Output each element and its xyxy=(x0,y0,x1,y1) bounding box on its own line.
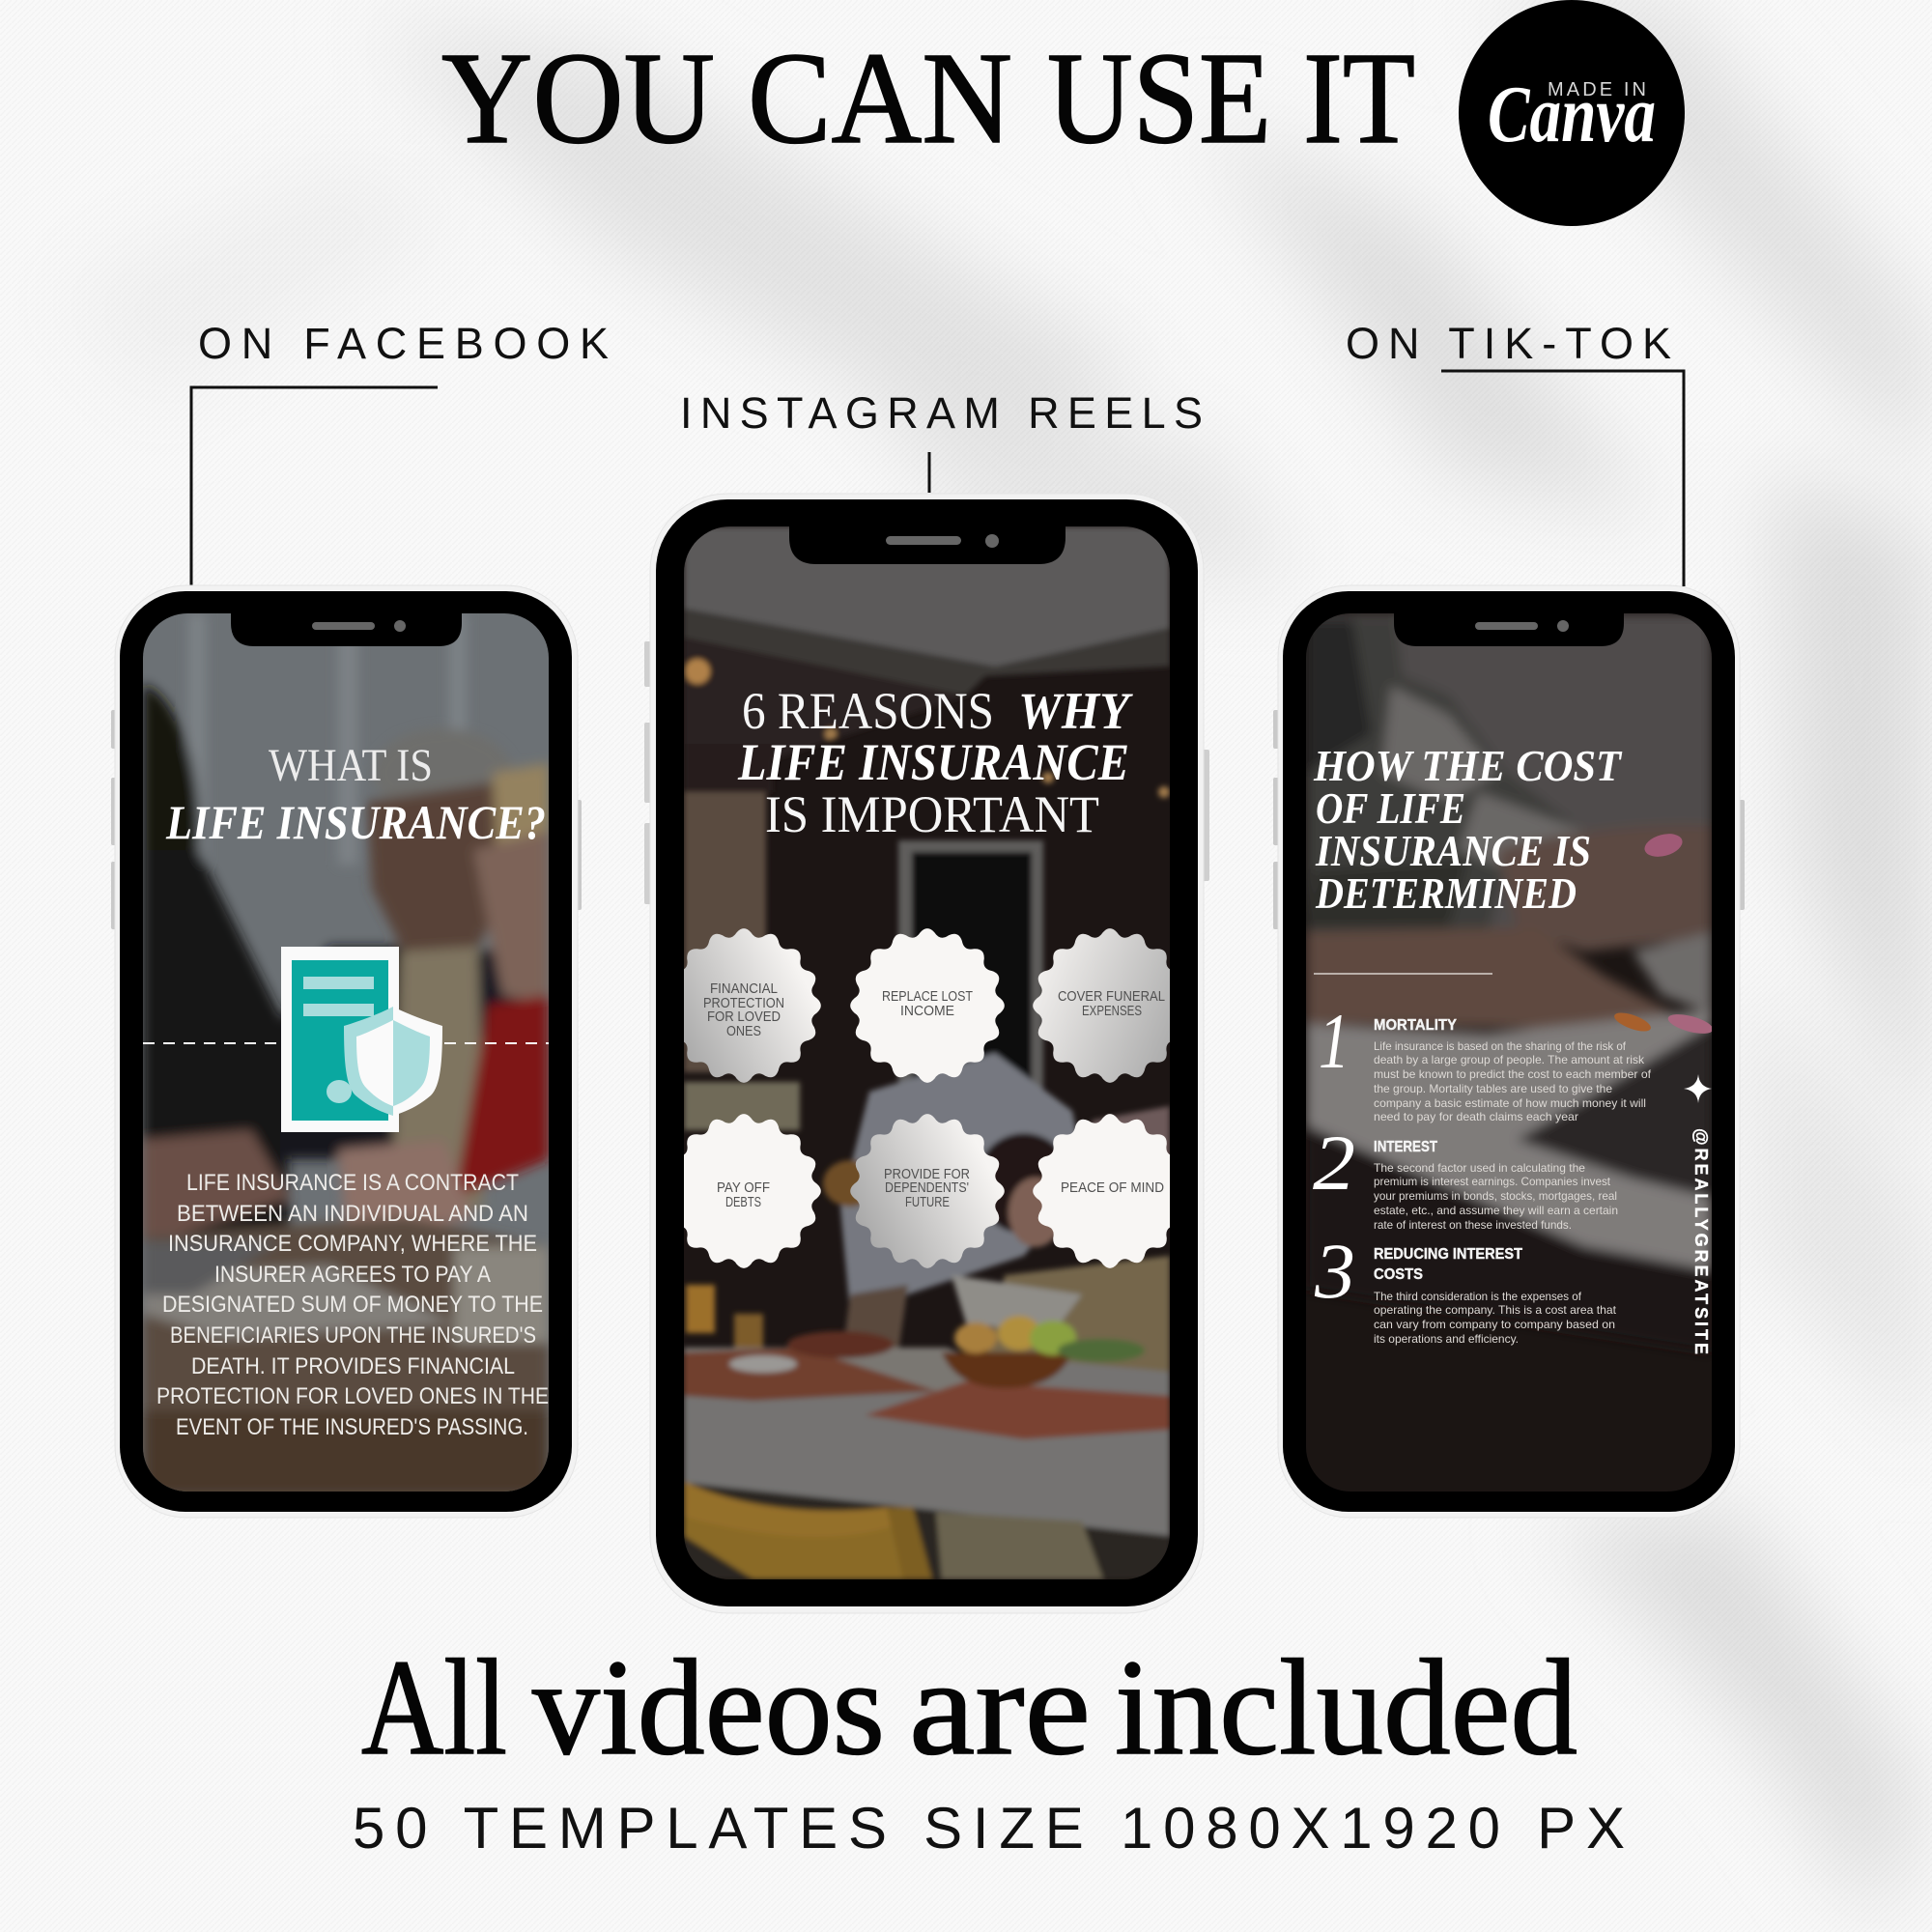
section 1: mortality: must be known to predict the cost to each member of xyxy=(1374,1067,1652,1081)
section 2: interest xyxy=(1313,1119,1618,1232)
screen photo: family meeting xyxy=(143,613,549,1497)
footer heading: videos xyxy=(532,1631,885,1783)
badge: cover funeral expenses xyxy=(1033,928,1170,1083)
section 2: interest: rate of interest on these invested funds. xyxy=(1374,1218,1572,1232)
badge: made in canva xyxy=(1459,0,1685,226)
heading: what is life insurance xyxy=(165,740,546,849)
text block: definition: DEATH. IT PROVIDES FINANCIAL xyxy=(191,1353,515,1379)
badge: financial protection xyxy=(684,928,821,1083)
connector: instagram xyxy=(927,452,931,493)
footer heading: All xyxy=(361,1631,507,1783)
heading: 6 reasons: LIFE INSURANCE xyxy=(737,733,1129,791)
footer heading: included xyxy=(1115,1631,1577,1783)
section 2: interest: premium is interest earnings. Companies invest xyxy=(1374,1175,1611,1188)
phone: facebook xyxy=(111,585,582,1518)
screen photo: hands on laptop xyxy=(1306,613,1715,1492)
screen photo: family at table xyxy=(684,526,1170,1579)
badge: peace of mind xyxy=(1033,1114,1170,1268)
handle text: @REALLYGREATSITE xyxy=(1691,1128,1711,1354)
section 2: interest: estate, etc., and assume they will earn a certain xyxy=(1374,1204,1618,1217)
text block: definition: BENEFICIARIES UPON THE INSURED'S xyxy=(170,1322,536,1349)
label: on facebook: ON FACEBOOK xyxy=(198,319,609,368)
section 3: reducing interest costs: can vary from company to company based on xyxy=(1374,1318,1615,1331)
text block: definition: INSURER AGREES TO PAY A xyxy=(214,1262,491,1288)
badge: financial protection: PROTECTION xyxy=(703,995,784,1011)
text block: definition: DESIGNATED SUM OF MONEY TO THE xyxy=(162,1292,543,1318)
label: instagram reels: INSTAGRAM REELS xyxy=(680,388,1203,438)
badge: replace lost income: REPLACE LOST xyxy=(882,988,973,1005)
heading: how the cost xyxy=(1313,741,1623,918)
label: on tik-tok: ON TIK-TOK xyxy=(1346,319,1671,368)
heading: how the cost: HOW THE COST xyxy=(1313,741,1623,790)
reason badges xyxy=(667,928,1187,1268)
section 1: mortality: company a basic estimate of how much money it will xyxy=(1374,1096,1646,1110)
badge: dependents' future: PROVIDE FOR xyxy=(884,1166,970,1182)
phone: instagram reels xyxy=(644,494,1209,1613)
text block: definition: LIFE INSURANCE IS A CONTRACT xyxy=(186,1170,519,1196)
section 1: mortality: Life insurance is based on the sharing of the risk of xyxy=(1374,1039,1627,1053)
title xyxy=(441,26,1415,171)
badge: dependents' future: DEPENDENTS' xyxy=(885,1179,969,1196)
heading: 6 reasons: IS IMPORTANT xyxy=(765,785,1099,843)
section 2: interest: The second factor used in calculating the xyxy=(1374,1161,1585,1175)
footer heading xyxy=(361,1631,1577,1783)
badge: pay off debts: DEBTS xyxy=(725,1194,761,1210)
badge: pay off debts: PAY OFF xyxy=(717,1179,770,1196)
section 1: mortality: the group. Mortality tables are used to give the xyxy=(1374,1082,1612,1095)
badge: financial protection: FOR LOVED xyxy=(707,1009,781,1025)
text block: definition xyxy=(156,1170,549,1440)
heading: how the cost: INSURANCE IS xyxy=(1315,826,1591,875)
section 1: mortality: death by a large group of people. The amount at risk xyxy=(1374,1053,1645,1066)
heading: how the cost: OF LIFE xyxy=(1316,783,1465,833)
heading: how the cost: DETERMINED xyxy=(1315,868,1577,918)
badge: replace lost income xyxy=(850,928,1005,1083)
title: USE xyxy=(1047,26,1271,171)
icon: policy document with shield xyxy=(143,947,549,1132)
badge: dependents' future xyxy=(850,1114,1005,1268)
badge: financial protection: ONES xyxy=(726,1023,761,1039)
section 3: reducing interest costs: 3 xyxy=(1314,1227,1355,1315)
badge: cover funeral expenses: EXPENSES xyxy=(1082,1003,1142,1019)
section 3: reducing interest costs: operating the company. This is a cost area that xyxy=(1374,1303,1617,1317)
text block: definition: BETWEEN AN INDIVIDUAL AND AN xyxy=(177,1201,528,1227)
badge: peace of mind: PEACE OF MIND xyxy=(1061,1179,1164,1196)
heading: what is life insurance: LIFE INSURANCE? xyxy=(165,795,546,849)
badge: pay off debts xyxy=(684,1114,821,1268)
footer heading: are xyxy=(909,1631,1091,1783)
section 1: mortality: MORTALITY xyxy=(1374,1017,1457,1034)
text block: definition: EVENT OF THE INSURED'S PASSING. xyxy=(176,1414,528,1440)
section 3: reducing interest costs: COSTS xyxy=(1374,1266,1423,1283)
badge: replace lost income: INCOME xyxy=(900,1003,954,1019)
badge: made in canva: Canva xyxy=(1488,70,1656,159)
heading: 6 reasons: WHY xyxy=(1018,682,1134,740)
connector: facebook xyxy=(191,387,438,586)
text block: definition: PROTECTION FOR LOVED ONES IN THE xyxy=(156,1383,549,1409)
section 2: interest: 2 xyxy=(1313,1119,1355,1207)
badge: financial protection: FINANCIAL xyxy=(710,980,778,997)
phone: tik-tok xyxy=(1273,585,1745,1518)
section 3: reducing interest costs: The third consideration is the expenses of xyxy=(1374,1290,1582,1303)
connector: tik-tok xyxy=(1441,371,1684,586)
badge: made in canva: MADE IN xyxy=(1548,79,1646,100)
section 2: interest: your premiums in bonds, stocks, mortgages, real xyxy=(1374,1189,1617,1203)
heading: what is life insurance: WHAT IS xyxy=(269,740,433,791)
section 1: mortality: need to pay for death claims each year xyxy=(1374,1110,1578,1123)
badge: cover funeral expenses: COVER FUNERAL xyxy=(1058,988,1165,1005)
title: IT xyxy=(1303,26,1415,171)
heading: 6 reasons: 6 REASONS xyxy=(742,682,994,740)
section 2: interest: INTEREST xyxy=(1374,1139,1437,1155)
icon: sparkle xyxy=(1684,1074,1712,1103)
section 1: mortality xyxy=(1319,997,1652,1123)
heading: 6 reasons xyxy=(737,682,1134,843)
footer subheading: 50 TEMPLATES SIZE 1080X1920 PX xyxy=(353,1796,1625,1861)
section 3: reducing interest costs: REDUCING INTEREST xyxy=(1374,1246,1522,1263)
badge: dependents' future: FUTURE xyxy=(905,1194,950,1210)
section 1: mortality: 1 xyxy=(1319,997,1350,1085)
text block: definition: INSURANCE COMPANY, WHERE THE xyxy=(168,1231,537,1257)
title: YOU xyxy=(441,26,715,171)
section 3: reducing interest costs: its operations and efficiency. xyxy=(1374,1332,1519,1346)
section 3: reducing interest costs xyxy=(1314,1227,1617,1346)
title: CAN xyxy=(748,26,1012,171)
